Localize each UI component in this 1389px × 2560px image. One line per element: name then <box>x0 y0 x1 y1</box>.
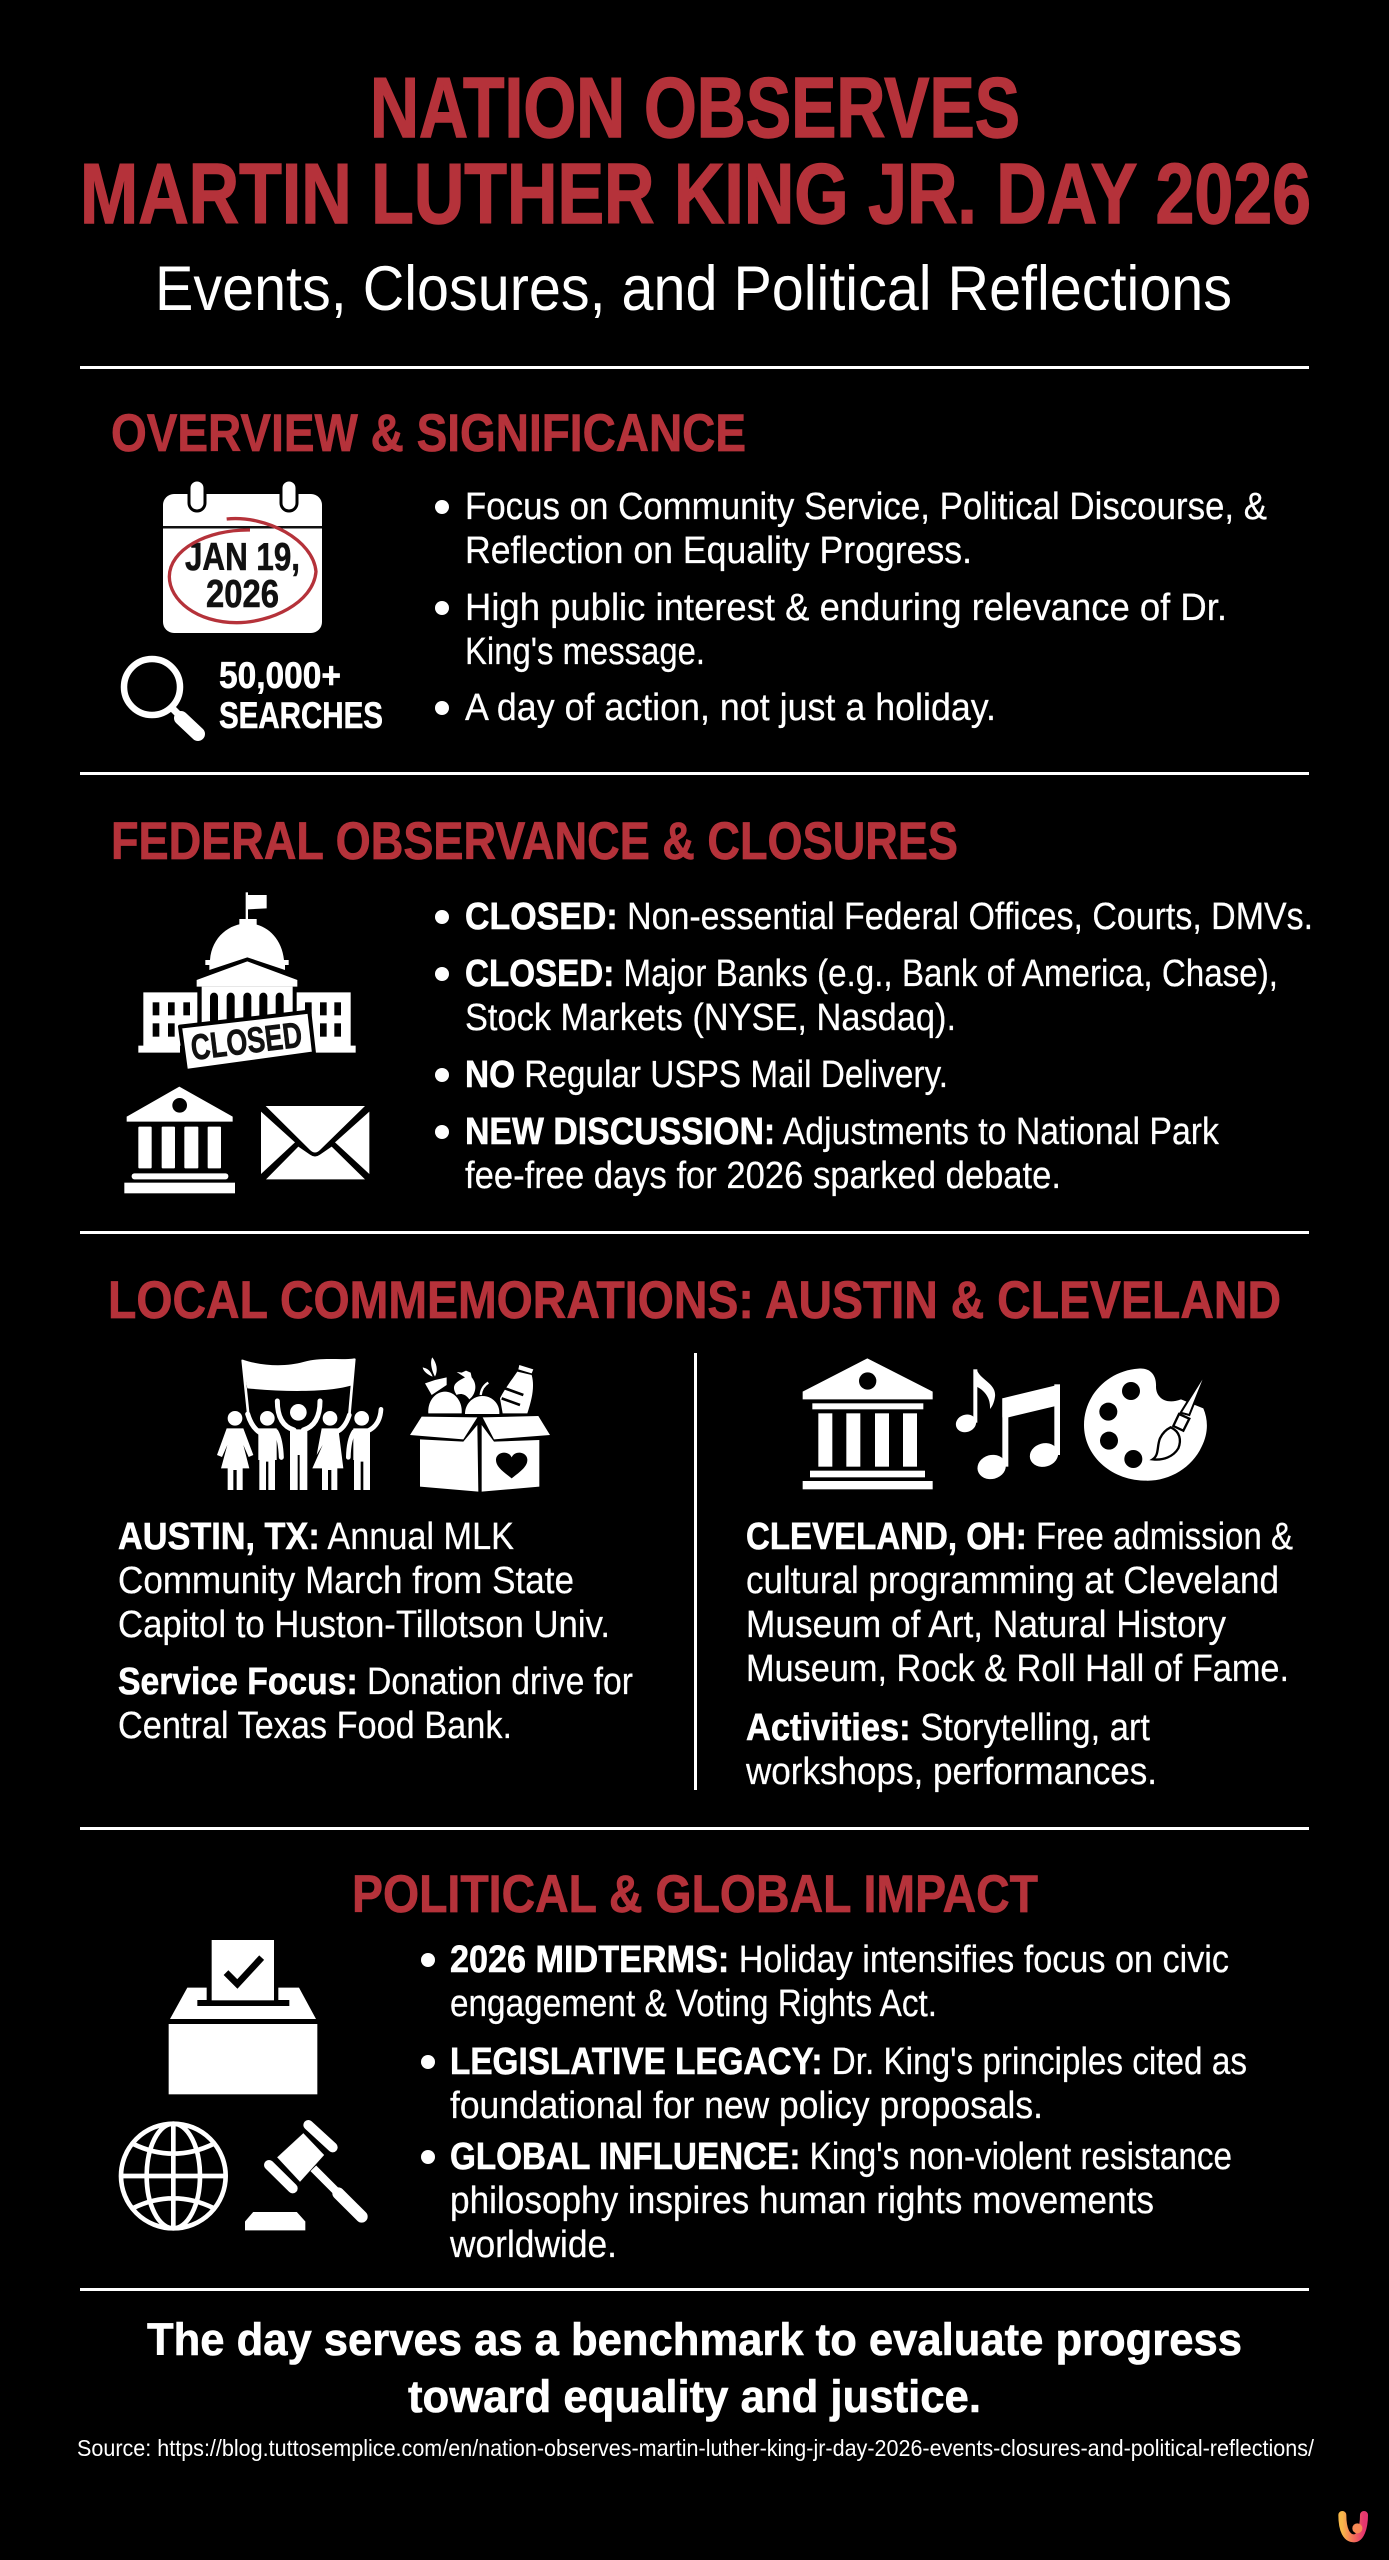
text: Austin: Community March from State <box>118 1560 574 1602</box>
text: Cleveland: workshops, performances. <box>745 1751 1157 1793</box>
icon: capitol closed: CLOSED <box>188 1014 304 1068</box>
bullet list: impact: foundational for new policy proposals. <box>450 2085 1043 2127</box>
heading: political: POLITICAL & GLOBAL IMPACT <box>352 1865 1038 1924</box>
icon: marching crowd <box>217 1358 381 1490</box>
icon: calendar <box>163 480 322 633</box>
conclusion <box>147 2314 1242 2422</box>
panel: federal observance and closures <box>111 812 1313 1197</box>
bullet list: closures: CLOSED: Major Banks (e.g., Bank of America, Chase), <box>465 953 1278 995</box>
heading: federal: FEDERAL OBSERVANCE & CLOSURES <box>111 812 958 871</box>
text: Cleveland: Activities: Storytelling, art <box>746 1707 1150 1749</box>
icon: capitol closed <box>138 892 356 1071</box>
bullet list: impact: LEGISLATIVE LEGACY: Dr. King's principles cited as <box>450 2041 1247 2083</box>
bullet list: impact: philosophy inspires human rights movements <box>450 2180 1154 2222</box>
icon: globe <box>121 2124 226 2228</box>
icon: ballot box <box>169 1940 317 2094</box>
icon: calendar: 2026 <box>206 573 279 616</box>
heading: overview: OVERVIEW & SIGNIFICANCE <box>111 404 746 463</box>
bullet list: overview <box>435 486 1267 729</box>
bullet list: overview: King's message. <box>465 631 705 673</box>
stat: searches <box>219 655 383 736</box>
bullet list: closures <box>435 896 1313 1197</box>
bullet list: overview: A day of action, not just a holiday. <box>465 687 996 729</box>
bullet list: closures: CLOSED: Non-essential Federal Offices, Courts, DMVs. <box>465 896 1313 938</box>
bullet list: overview: Focus on Community Service, Political Discourse, & <box>465 486 1267 528</box>
text: Cleveland: Museum, Rock & Roll Hall of Fame. <box>746 1648 1289 1690</box>
text: Austin: Central Texas Food Bank. <box>118 1705 512 1747</box>
text: Austin: AUSTIN, TX: Annual MLK <box>118 1516 514 1558</box>
icon: music notes <box>953 1369 1061 1482</box>
stat: searches: SEARCHES <box>219 695 383 736</box>
panel: political and global impact <box>121 1865 1247 2266</box>
bullet list: impact <box>421 1939 1247 2266</box>
text: Austin: Service Focus: Donation drive for <box>118 1661 633 1703</box>
bullet list: impact: GLOBAL INFLUENCE: King's non-violent resistance <box>450 2136 1232 2178</box>
icon: art palette <box>1084 1369 1208 1481</box>
bullet list: overview: Reflection on Equality Progress. <box>465 530 972 572</box>
conclusion: The day serves as a benchmark to evaluate progress <box>147 2314 1242 2365</box>
icon: food donation box <box>410 1357 550 1492</box>
title: NATION OBSERVES <box>370 61 1020 156</box>
bullet list: impact: engagement & Voting Rights Act. <box>450 1983 937 2025</box>
bullet list: closures: NO Regular USPS Mail Delivery. <box>465 1054 948 1096</box>
source: Source: https://blog.tuttosemplice.com/en/nation-observes-martin-luther-king-jr-day-2026-events-closures-and-political-reflections/ <box>77 2435 1315 2461</box>
text: Cleveland: cultural programming at Cleveland <box>746 1560 1279 1602</box>
bullet list: overview: High public interest & enduring relevance of Dr. <box>465 587 1227 629</box>
panel: local commemorations <box>108 1271 1293 1793</box>
bullet list: closures: NEW DISCUSSION: Adjustments to National Park <box>465 1111 1220 1153</box>
icon: logo <box>1342 2515 1364 2538</box>
subtitle: Events, Closures, and Political Reflections <box>155 254 1232 324</box>
icon: bank <box>124 1087 235 1193</box>
stat: searches: 50,000+ <box>219 655 341 696</box>
text: Austin: Capitol to Huston-Tillotson Univ. <box>118 1604 610 1646</box>
bullet list: closures: fee-free days for 2026 sparked debate. <box>465 1155 1061 1197</box>
icon: magnifying glass <box>124 659 198 734</box>
text: Cleveland: CLEVELAND, OH: Free admission & <box>746 1516 1293 1558</box>
icon: envelope <box>261 1106 369 1179</box>
icon: gavel <box>245 2125 362 2230</box>
icon: museum <box>803 1358 933 1489</box>
conclusion: toward equality and justice. <box>408 2371 981 2422</box>
text: Cleveland <box>745 1516 1293 1793</box>
title <box>80 61 1311 242</box>
text: Austin <box>118 1516 633 1747</box>
bullet list: closures: Stock Markets (NYSE, Nasdaq). <box>465 997 956 1039</box>
panel: overview and significance <box>111 404 1267 736</box>
text: Cleveland: Museum of Art, Natural History <box>746 1604 1226 1646</box>
icon: calendar: JAN 19, <box>185 536 300 579</box>
bullet list: impact: worldwide. <box>449 2224 617 2266</box>
bullet list: impact: 2026 MIDTERMS: Holiday intensifies focus on civic <box>450 1939 1229 1981</box>
